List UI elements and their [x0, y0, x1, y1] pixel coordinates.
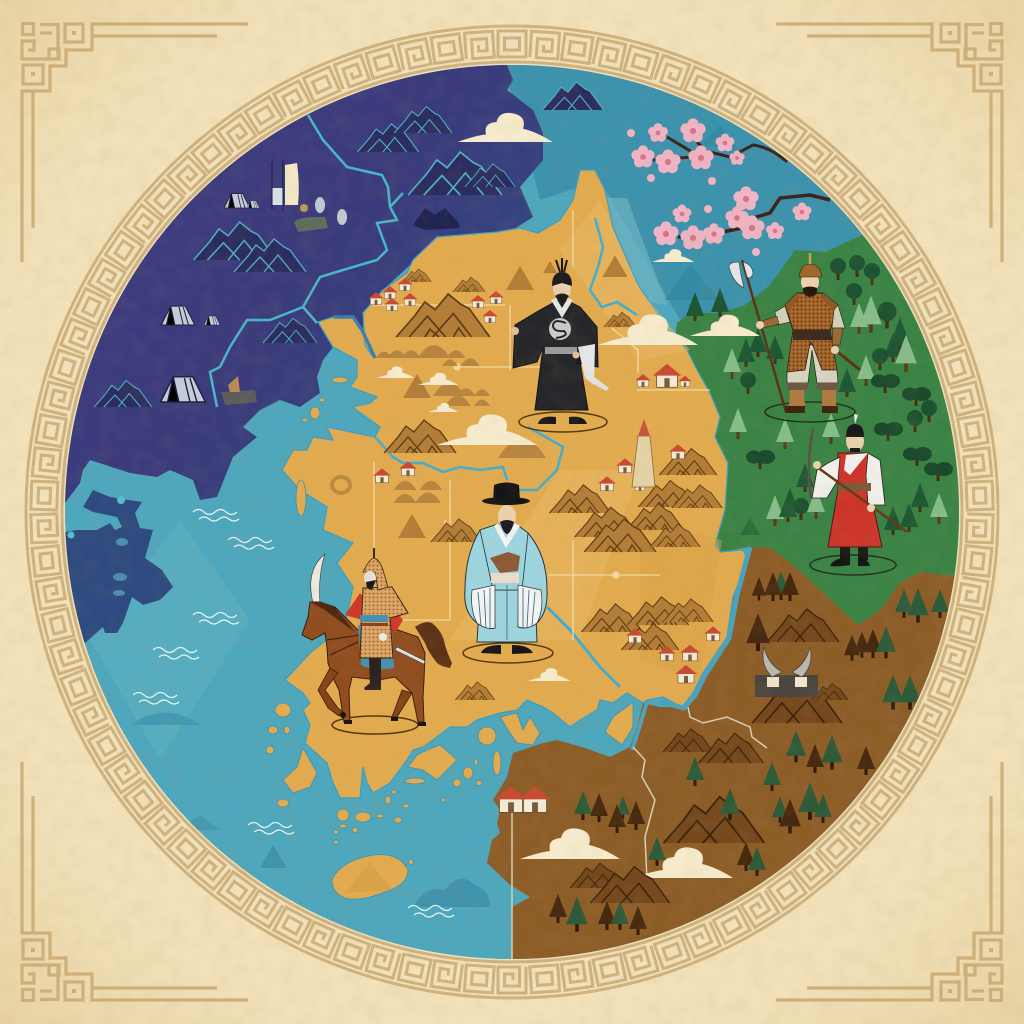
cherry blossom branch — [627, 118, 830, 256]
northwest details: dark silhouette — [413, 208, 460, 230]
figure: mounted warrior on horse — [302, 548, 452, 734]
sea waves — [133, 510, 454, 917]
roads on peninsula — [373, 210, 710, 640]
northwest details: nomad camps — [161, 160, 299, 402]
southeast brown land features — [495, 571, 949, 935]
northwest details: riders — [221, 197, 347, 405]
peninsula villages — [368, 278, 722, 683]
circular map — [55, 60, 970, 970]
northwest details: mountains — [94, 82, 604, 407]
islands: southwest and south coast — [266, 377, 633, 864]
corner ornament: bottom right — [776, 762, 1002, 1000]
rivers and coast channels — [210, 115, 750, 750]
cloud: north — [458, 113, 552, 142]
region: eastern green land — [675, 232, 970, 625]
brown land tracks — [512, 707, 767, 960]
peninsula mountains and hills — [332, 255, 722, 700]
region: central golden peninsula — [282, 170, 748, 798]
region: southeastern brown land — [487, 547, 970, 970]
island: Jeju — [332, 855, 408, 899]
figure: armored warrior with axe — [729, 253, 860, 422]
figure: archer in red robe — [809, 414, 907, 575]
corner ornament: top right — [776, 24, 1002, 262]
corner ornament: bottom left — [22, 762, 248, 1000]
region: western sea — [60, 60, 970, 964]
green land forest — [686, 255, 953, 535]
pagoda tower — [632, 419, 655, 487]
figure: scholar in light blue robe — [463, 482, 553, 663]
region: northwestern purple land — [55, 60, 543, 510]
horned gate — [755, 647, 818, 697]
figure: king in black robe — [511, 258, 609, 432]
clouds over the map — [376, 249, 760, 878]
region: dark navy coast — [60, 490, 173, 643]
corner ornament: top left — [22, 24, 248, 262]
